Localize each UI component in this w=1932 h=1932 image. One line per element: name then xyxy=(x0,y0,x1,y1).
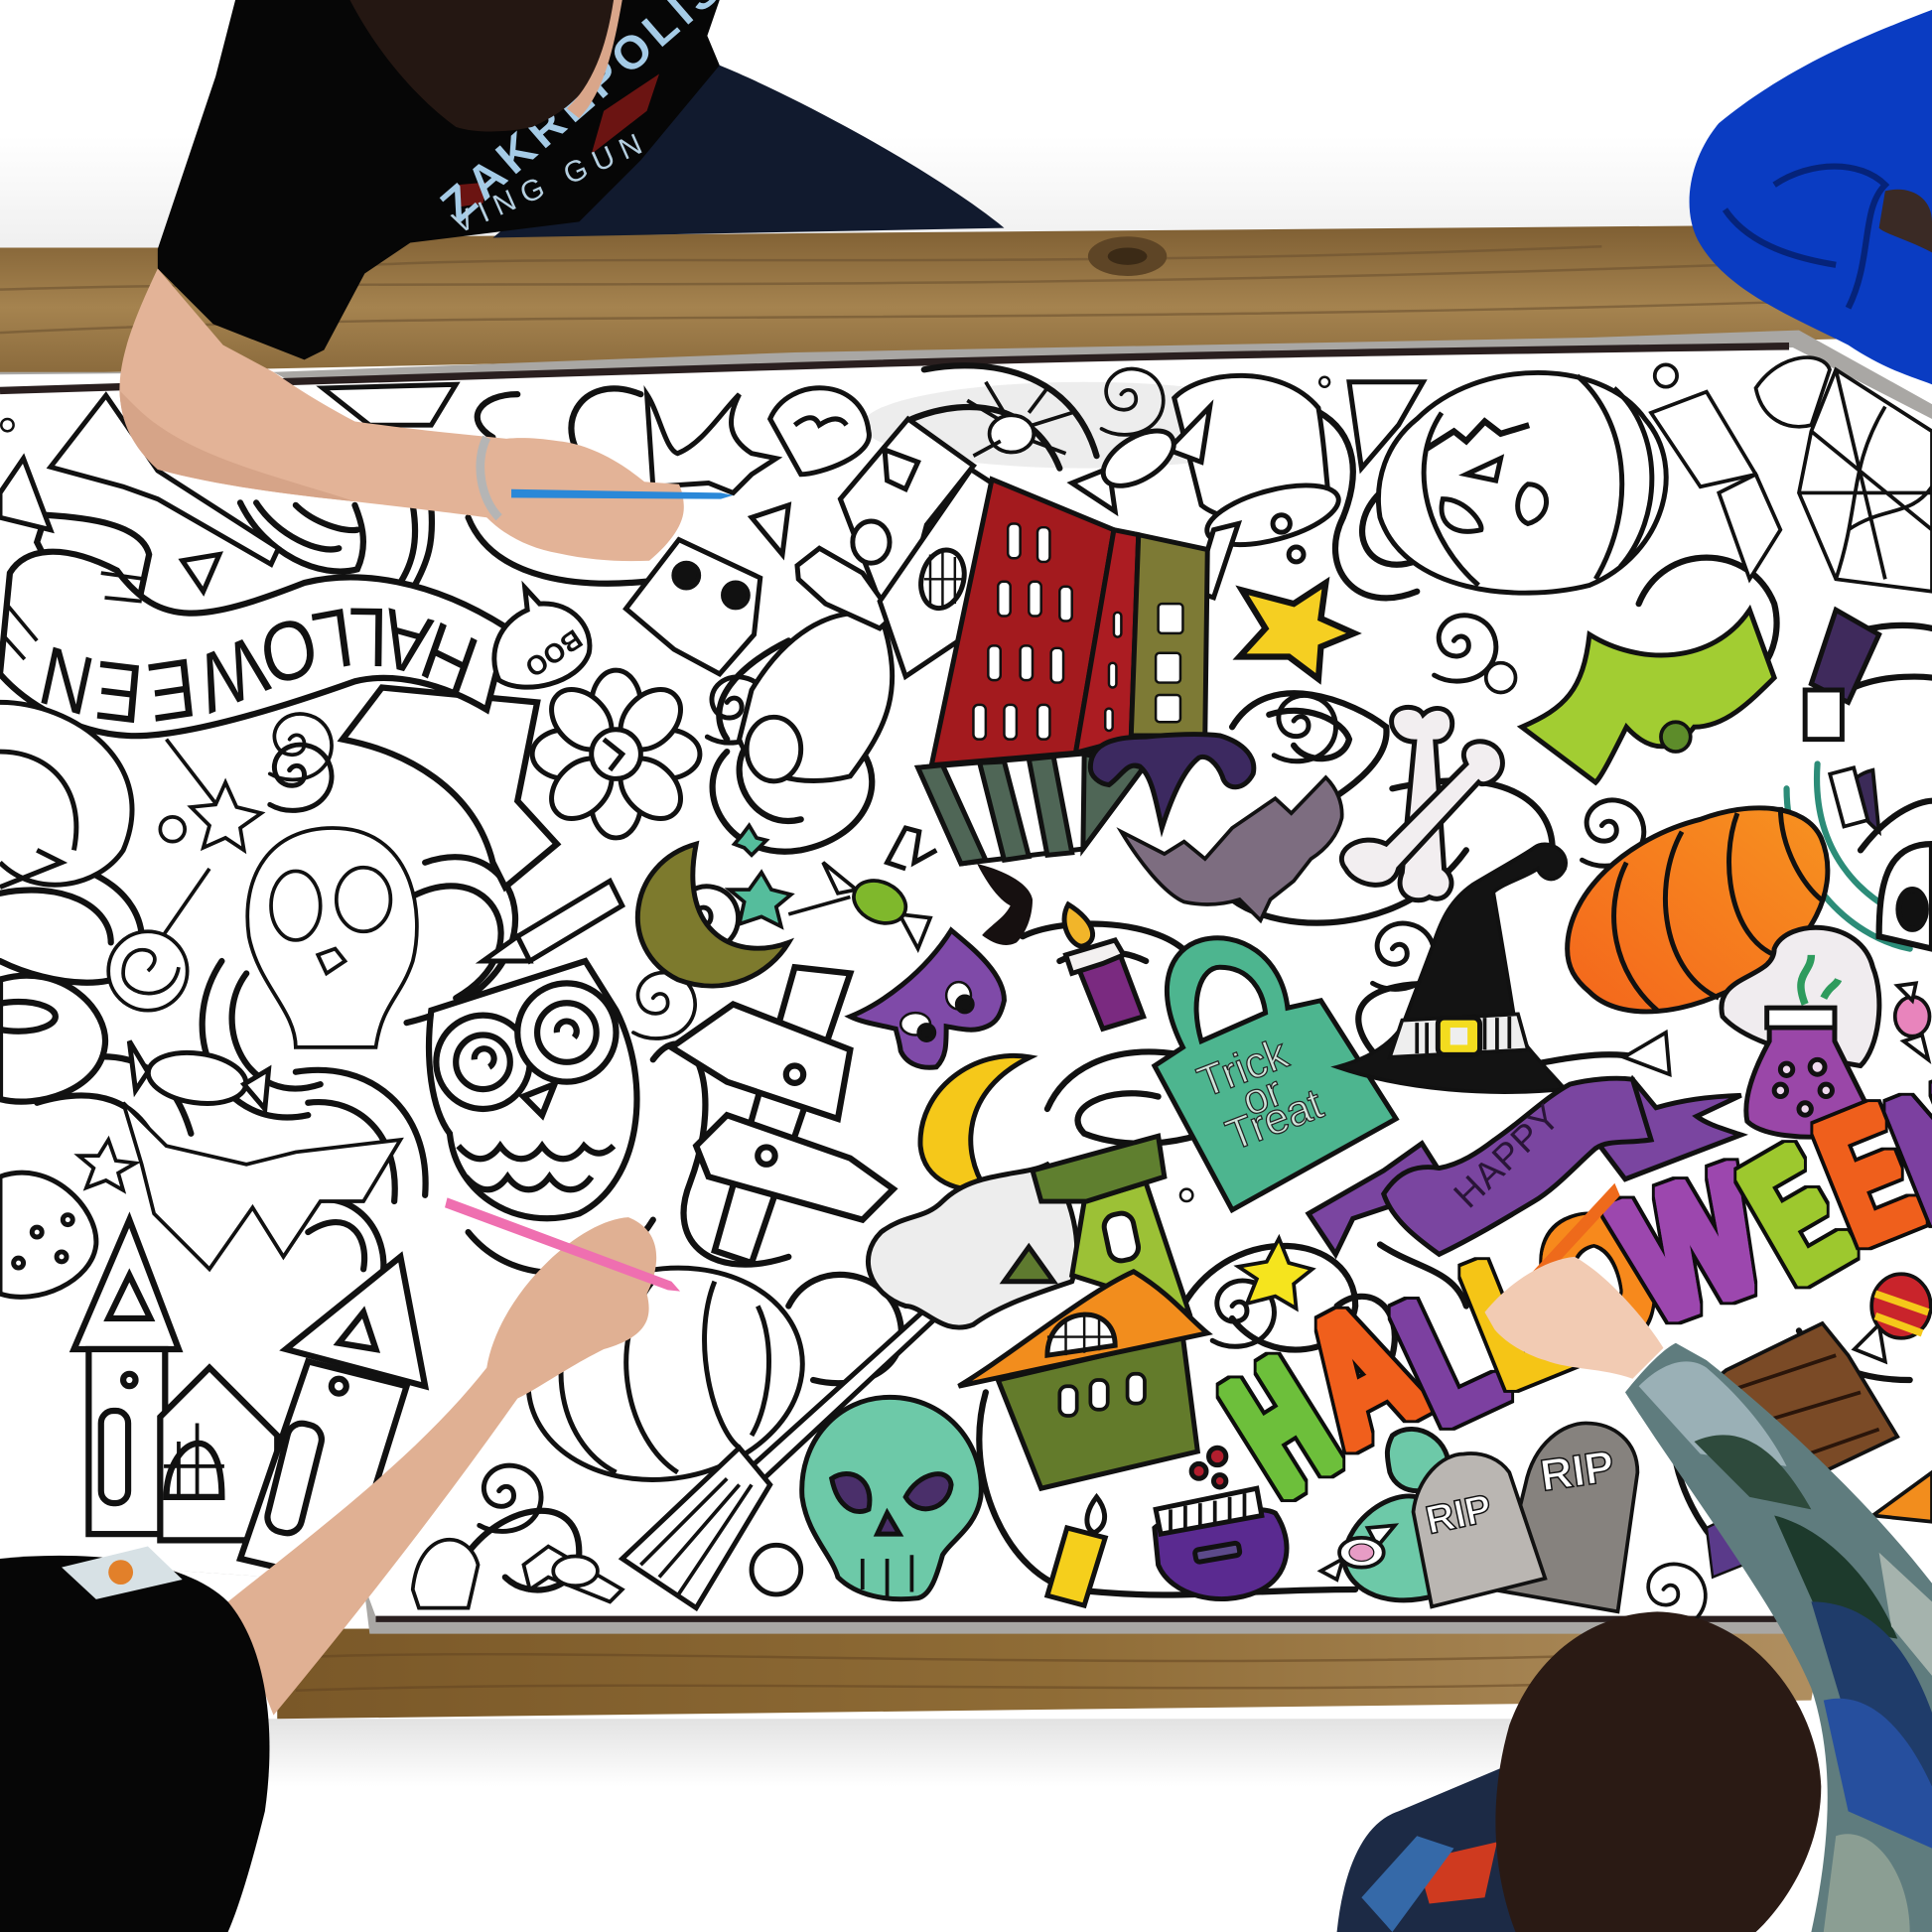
person bottom right: camo sleeve xyxy=(1625,1343,1932,1932)
purple potion bottle top right xyxy=(1805,610,1879,740)
teal skull xyxy=(802,1397,981,1599)
bag text: or xyxy=(1236,1067,1289,1126)
banner: HALLOWEEN outline xyxy=(0,512,562,892)
banner word: HALLOWEEN xyxy=(41,608,478,723)
black feather xyxy=(977,864,1033,945)
person bottom left: black shirt xyxy=(0,1547,269,1932)
outline pumpkin bottom xyxy=(511,1247,819,1501)
spider xyxy=(967,382,1072,456)
gravestone left: RIP xyxy=(1422,1486,1495,1543)
outline small house top xyxy=(797,419,992,676)
colourful HALLOWEEN lettering xyxy=(1197,1046,1932,1531)
purple happy ribbon xyxy=(1309,1078,1741,1254)
outline mushroom with bubbles xyxy=(1174,375,1344,598)
colourful HALLOWEEN lettering: E xyxy=(1717,1112,1875,1318)
trick or treat bag xyxy=(1155,938,1396,1210)
pumpkin flower outline xyxy=(532,670,700,838)
purple mask xyxy=(850,930,1004,1067)
owl xyxy=(429,961,636,1218)
green bat xyxy=(1522,610,1774,782)
colourful HALLOWEEN lettering: L xyxy=(1443,1210,1590,1425)
bat outline xyxy=(123,1103,400,1269)
yellow candle xyxy=(1047,1497,1105,1605)
person top right: blue hoodie xyxy=(1690,10,1932,384)
white swirl ghost right xyxy=(1879,844,1932,949)
yellow star xyxy=(1240,583,1354,679)
left edge ghost outline xyxy=(0,976,105,1102)
paper sheet xyxy=(0,331,1932,1634)
bag text xyxy=(1191,1030,1329,1160)
pink marker xyxy=(445,1197,680,1292)
small outline triangle xyxy=(1624,1033,1670,1074)
green wrapped candy xyxy=(788,863,930,949)
cloud xyxy=(868,1165,1077,1327)
outline candy bottom xyxy=(413,1540,622,1608)
colourful HALLOWEEN lettering: A xyxy=(1273,1264,1449,1483)
pink eyeball candy xyxy=(1320,1525,1395,1580)
teal stars xyxy=(730,826,791,926)
lollipop outline xyxy=(108,869,209,1011)
bag text: Treat xyxy=(1220,1080,1329,1160)
wrapped candy top xyxy=(1072,407,1210,511)
yellow star bottom xyxy=(1238,1238,1312,1309)
outline small star left xyxy=(78,1140,136,1190)
bag text: Trick xyxy=(1191,1030,1295,1107)
colourful HALLOWEEN lettering: W xyxy=(1594,1130,1787,1362)
black witch hat xyxy=(1337,844,1566,1092)
gravestone right: RIP xyxy=(1537,1443,1617,1501)
gravestone left xyxy=(1414,1453,1545,1606)
person bottom right: hair xyxy=(1495,1611,1821,1932)
speech bubble: BOO: BOO xyxy=(519,623,588,683)
bubbling flask outline xyxy=(0,1173,96,1297)
table top wood xyxy=(0,225,1849,374)
orange pumpkin xyxy=(1568,807,1828,1012)
gravestone right xyxy=(1499,1423,1637,1611)
outline house with arched window xyxy=(160,1368,277,1540)
person top left: face sliver xyxy=(567,0,622,118)
ribbon text: HAPPY xyxy=(1446,1096,1568,1215)
red striped candy right xyxy=(1855,1274,1931,1361)
candy outline left xyxy=(129,1041,269,1109)
speech bubble: BOO xyxy=(494,588,590,687)
outline church left xyxy=(73,1220,179,1534)
top right outline book, candle, acorn and web xyxy=(1651,357,1932,592)
person top left: arm and hand xyxy=(119,269,733,561)
purple small shape xyxy=(1707,1516,1743,1578)
outline skull xyxy=(247,828,417,1047)
person top left: hair xyxy=(349,0,614,131)
person top left: black t-shirt xyxy=(158,0,730,359)
top row outline doodles xyxy=(0,384,893,781)
striped witch sock xyxy=(888,753,1144,869)
green teal swirl by gravestones xyxy=(1343,1429,1449,1600)
person top left: black t-shirt: VING GUN xyxy=(448,128,647,240)
colourful HALLOWEEN lettering: H xyxy=(1197,1322,1364,1531)
signpost xyxy=(671,967,894,1263)
left pumpkin partial xyxy=(0,702,132,888)
yellow moon xyxy=(920,1055,1031,1189)
outline crayon candy xyxy=(483,881,622,961)
windows xyxy=(973,523,1182,740)
mushroom right xyxy=(1830,767,1879,832)
orange fragment right edge xyxy=(1872,1472,1932,1522)
outline tower right of church xyxy=(240,1257,425,1584)
orange roof green house xyxy=(959,1272,1207,1488)
large outline pumpkin with jack o lantern face xyxy=(1349,372,1666,593)
purple candle xyxy=(1064,904,1144,1029)
outline star with wand xyxy=(167,740,261,850)
person bottom left: arm and hand xyxy=(228,1197,680,1716)
grey purple bat xyxy=(1121,777,1342,920)
person bottom right: jacket xyxy=(1337,1762,1516,1932)
bones xyxy=(1341,707,1502,900)
person top left: navy trousers xyxy=(492,66,1004,238)
colourful HALLOWEEN lettering: L xyxy=(1371,1248,1527,1462)
table bottom wood xyxy=(277,1626,1824,1719)
blue marker xyxy=(511,489,733,499)
purple curled witch hat xyxy=(1090,735,1254,828)
person bottom right: hand and marker xyxy=(1484,1186,1663,1379)
green castle tower xyxy=(1004,1136,1189,1312)
purple cauldron xyxy=(1155,1448,1287,1599)
crescent moon olive xyxy=(637,844,788,986)
wooden sign xyxy=(1670,1323,1897,1540)
red and olive apartment building xyxy=(931,480,1207,765)
colourful HALLOWEEN lettering: O xyxy=(1519,1173,1676,1387)
broom xyxy=(622,1294,949,1608)
background swirls and ribbons xyxy=(0,364,1932,1630)
pink candy right edge xyxy=(1895,983,1930,1059)
purple potion flask xyxy=(1722,927,1879,1137)
shirt label xyxy=(62,1547,183,1599)
